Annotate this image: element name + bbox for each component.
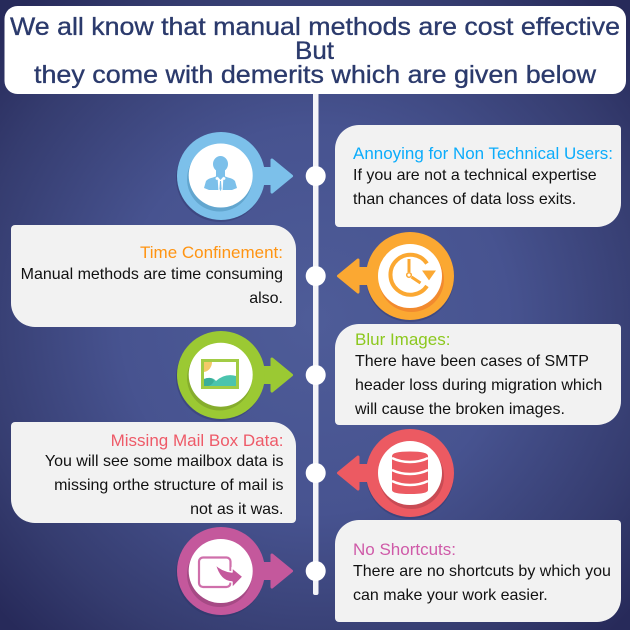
panel: time confinement: also.: [249, 290, 283, 307]
panel: time confinement: [11, 225, 296, 327]
panel: blur images: header loss during migration which: [355, 377, 602, 394]
icon badge: clock: [338, 232, 454, 322]
title banner: But: [295, 37, 334, 65]
timeline dot 2: [306, 266, 326, 286]
timeline dot 3: [306, 365, 326, 385]
timeline dot 4: [306, 463, 326, 483]
icon badge: business person: [176, 132, 292, 222]
panel: missing mail box data: not as it was.: [190, 501, 284, 518]
panel: annoying for non technical users: If you are not a technical expertise: [353, 167, 597, 184]
title banner: [4, 6, 626, 94]
panel: missing mail box data: [11, 422, 296, 523]
timeline dot 1: [306, 166, 326, 186]
panel: annoying for non technical users: than chances of data loss exits.: [353, 191, 576, 208]
panel: blur images: will cause the broken images.: [354, 401, 565, 418]
panel: time confinement: Manual methods are time consuming: [21, 266, 283, 283]
panel: no shortcuts: No Shortcuts:: [353, 540, 456, 559]
panel: blur images: [335, 324, 621, 425]
panel: annoying for non technical users: Annoying for Non Technical Users:: [353, 144, 613, 163]
panel: missing mail box data: missing orthe structure of mail is: [54, 477, 284, 494]
timeline spine: [313, 90, 318, 595]
panel: missing mail box data: You will see some mailbox data is: [45, 453, 284, 470]
panel: annoying for non technical users: [335, 125, 621, 227]
panel: no shortcuts: [335, 520, 621, 622]
panel: no shortcuts: can make your work easier.: [353, 587, 548, 604]
panel: time confinement: Time Confinement:: [140, 243, 283, 262]
panel: no shortcuts: There are no shortcuts by which you: [353, 563, 611, 580]
title banner: they come with demerits which are given below: [34, 61, 597, 89]
panel: blur images: Blur Images:: [355, 330, 450, 349]
title banner: We all know that manual methods are cost effective: [10, 13, 620, 41]
icon badge: shortcut: [176, 527, 292, 617]
icon badge: database: [338, 429, 454, 519]
timeline dot 5: [306, 561, 326, 581]
icon badge: image: [176, 331, 292, 421]
panel: blur images: There have been cases of SMTP: [355, 353, 589, 370]
panel: missing mail box data: Missing Mail Box Data:: [111, 431, 284, 450]
